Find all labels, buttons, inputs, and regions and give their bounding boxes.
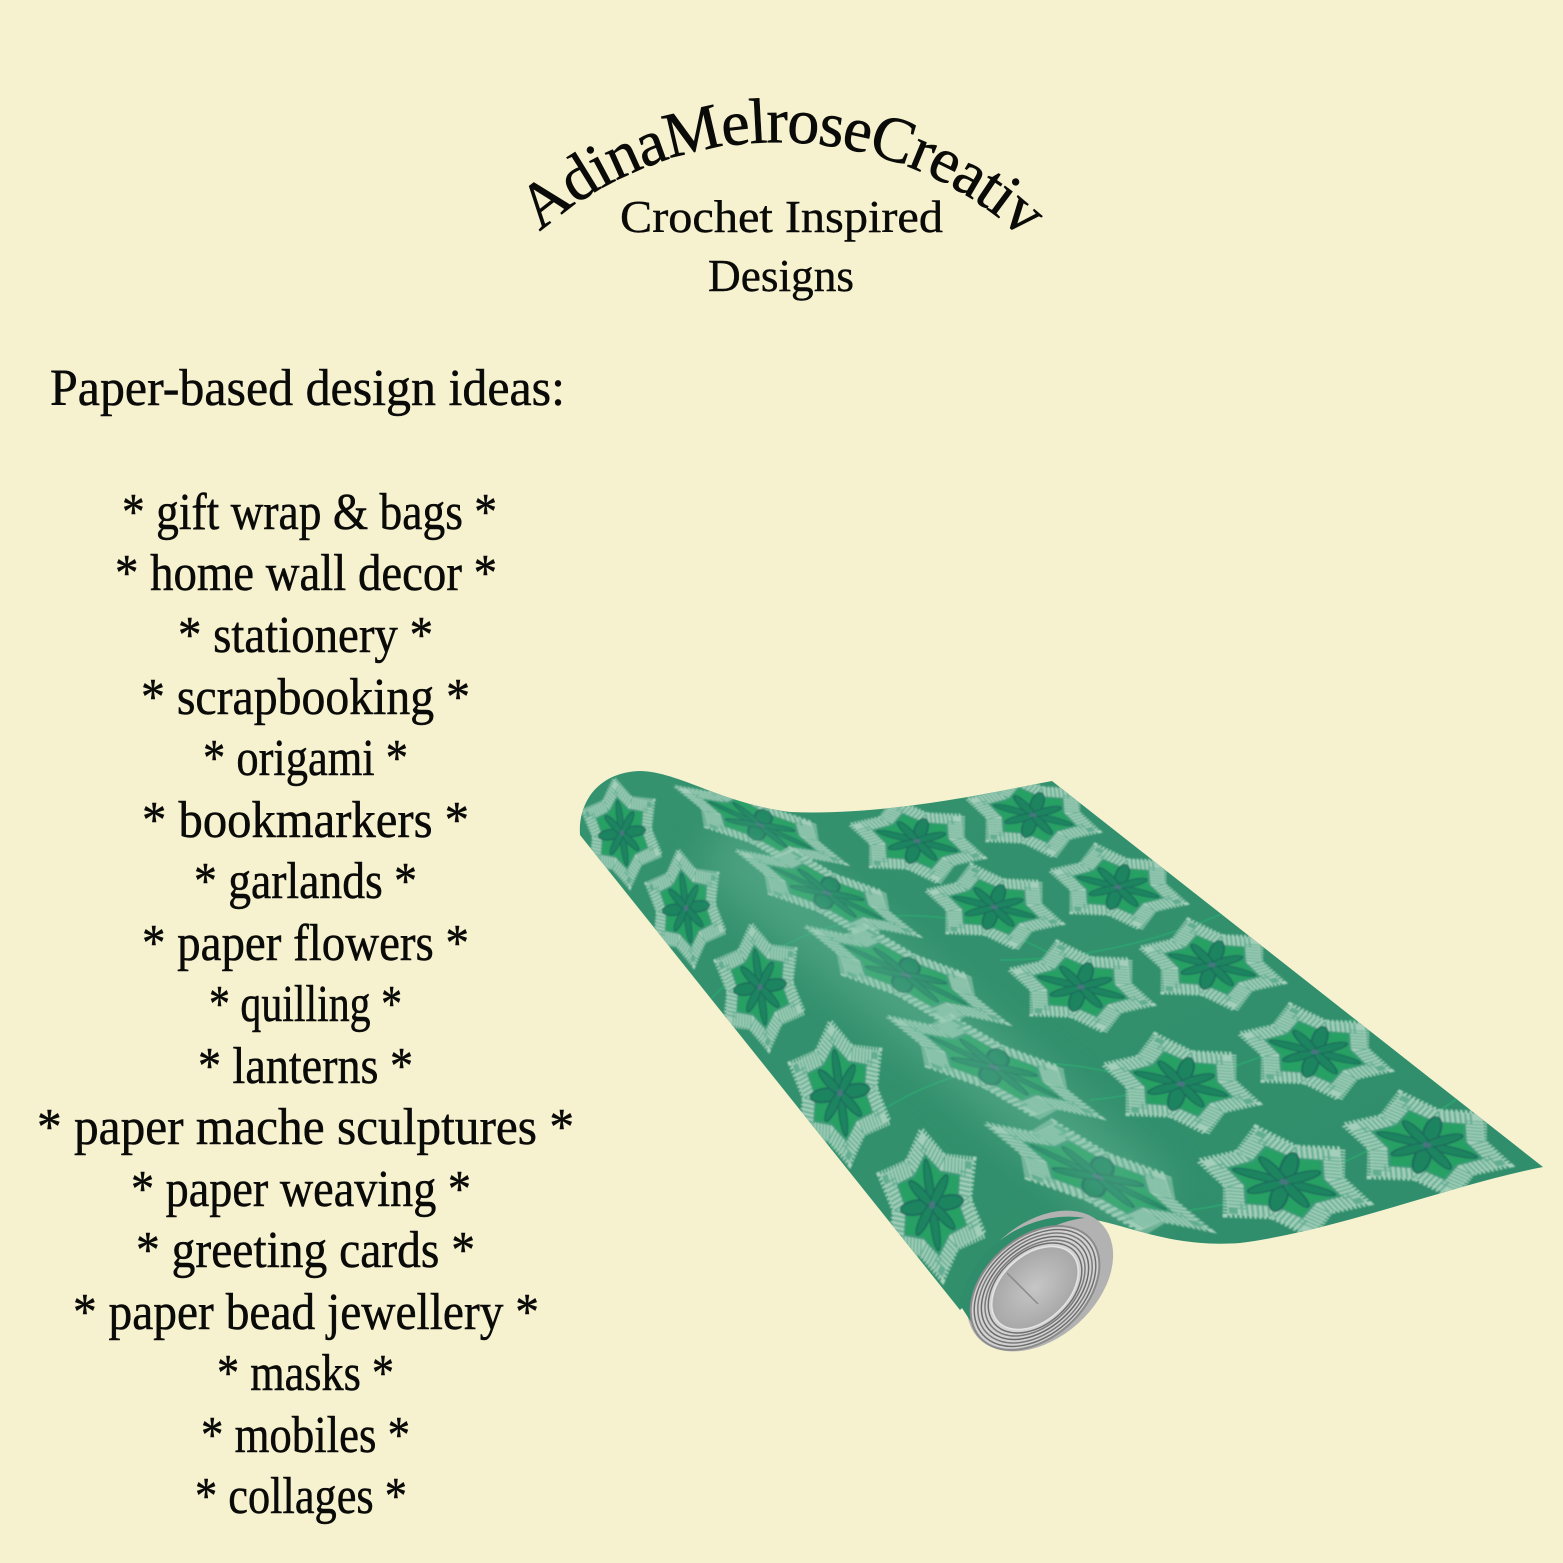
text block: idea list: * stationery *	[178, 607, 433, 664]
logo: subtitle	[620, 191, 943, 301]
squashed stars on the curve	[673, 784, 1218, 1234]
highlight band	[720, 840, 1150, 1210]
text block: idea list: * paper flowers *	[142, 915, 469, 972]
flat stars	[839, 765, 1525, 1247]
text block: idea list: * quilling *	[209, 976, 402, 1033]
text block: idea list: * bookmarkers *	[142, 792, 469, 849]
text block: idea list: * paper weaving *	[131, 1161, 471, 1218]
logo: subtitle: Crochet Inspired	[620, 191, 943, 242]
illustration: wrapping paper roll	[570, 760, 1560, 1380]
text block: idea list: * gift wrap & bags *	[122, 484, 497, 541]
text block: idea list: * garlands *	[194, 853, 417, 910]
text block: idea list: * home wall decor *	[115, 545, 497, 602]
text block: idea list: * mobiles *	[201, 1407, 410, 1464]
text block: idea list	[37, 484, 574, 1525]
text block: idea list: * masks *	[217, 1345, 394, 1402]
left column stars	[579, 774, 990, 1287]
logo: curved brand name: AdinaMelroseCreativ	[528, 98, 1043, 232]
text block: idea list: * paper mache sculptures *	[37, 1099, 574, 1156]
text block: idea list: * scrapbooking *	[141, 669, 470, 726]
roll end	[939, 1182, 1141, 1380]
heading: Paper-based design ideas:	[50, 360, 565, 417]
text block: idea list: * greeting cards *	[136, 1222, 475, 1279]
text block: idea list: * paper bead jewellery *	[73, 1284, 539, 1341]
text block: idea list: * collages *	[195, 1468, 407, 1525]
text block: idea list: * origami *	[203, 730, 408, 787]
logo: subtitle: Designs	[708, 250, 854, 301]
paper sheet	[570, 760, 1560, 1360]
text block: idea list: * lanterns *	[198, 1038, 413, 1095]
